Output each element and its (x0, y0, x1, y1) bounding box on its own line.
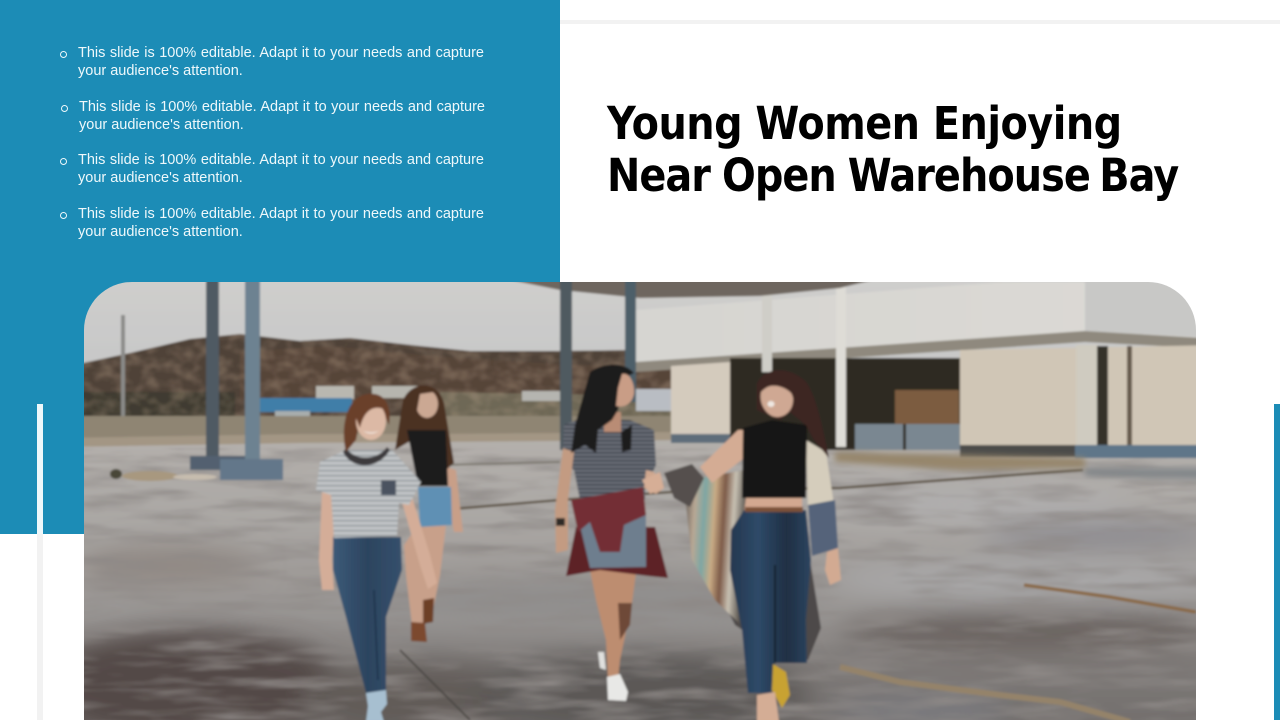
woman in dress with plaid shirt (555, 365, 668, 701)
bullet 1: your audience's attention. (78, 63, 243, 79)
bullet list (60, 45, 485, 240)
bullet 3: This slide is 100% editable. Adapt it to your needs and capture (78, 152, 484, 168)
bullet 2: This slide is 100% editable. Adapt it to your needs and capture (79, 99, 485, 115)
title: Young Women Enjoying (607, 97, 1122, 150)
asphalt texture (60, 448, 1220, 720)
debris near pole bases (110, 469, 217, 481)
panel: blue background (0, 0, 560, 534)
top divider line (560, 20, 1280, 24)
sky (84, 282, 1158, 364)
canopy roof (514, 282, 870, 300)
woman in back with denim shorts (395, 385, 463, 642)
distant structures (121, 315, 672, 421)
warehouse building (636, 270, 1220, 458)
dirt strip by building (835, 452, 1220, 480)
left vertical accent bar (37, 404, 43, 720)
canopy poles (190, 272, 636, 480)
dark asphalt patches (84, 508, 1196, 720)
ground (60, 438, 1220, 720)
right vertical accent bar (1274, 404, 1280, 720)
title (606, 97, 1178, 202)
bullet 1 (60, 45, 484, 79)
bullet 1: This slide is 100% editable. Adapt it to your needs and capture (78, 45, 484, 61)
ground cracks and grass (400, 462, 1196, 720)
dry field strip (84, 414, 672, 439)
bullet 3: your audience's attention. (78, 170, 243, 186)
woman in black top with patterned cardigan (642, 370, 841, 720)
bullet 3 (60, 152, 484, 186)
woman in striped tee and jeans (316, 394, 437, 720)
wooded hill (60, 334, 690, 420)
title: Near Open Warehouse Bay (607, 149, 1178, 202)
bullet 4: This slide is 100% editable. Adapt it to your needs and capture (78, 206, 484, 222)
bullet 4 (60, 206, 484, 240)
bullet 2 (61, 99, 485, 133)
bullet 4: your audience's attention. (78, 224, 243, 240)
photo: four women walking near warehouse (84, 282, 1196, 720)
bullet 2: your audience's attention. (79, 117, 244, 133)
